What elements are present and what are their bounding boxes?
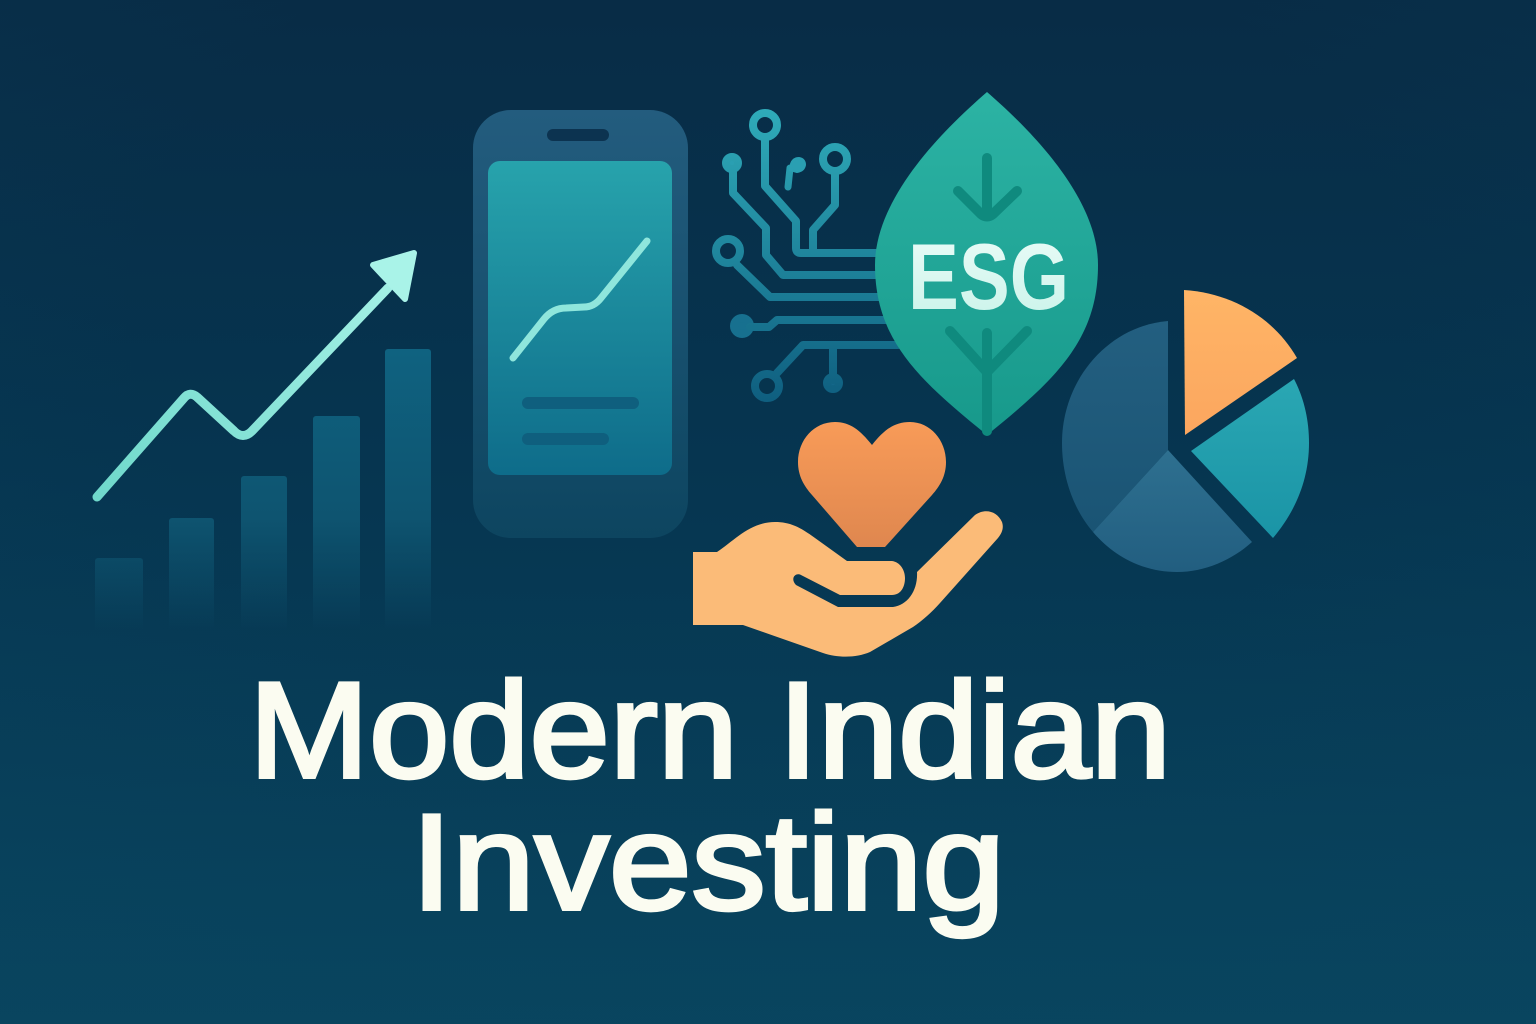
bar chart bbox=[95, 349, 431, 630]
pie slice: dark blue bbox=[1062, 321, 1168, 532]
icon: heart bbox=[798, 422, 946, 547]
title bbox=[249, 654, 1171, 938]
title: Investing bbox=[411, 786, 1005, 938]
pie slice: orange bbox=[1184, 290, 1297, 435]
icon: trend arrow bbox=[97, 253, 414, 497]
icon: ESG leaf bbox=[875, 92, 1098, 435]
chart: pie bbox=[1062, 290, 1309, 572]
icon: hand bbox=[693, 511, 1003, 657]
text: ESG: ESG bbox=[908, 224, 1069, 329]
pie slice: mid blue bbox=[1093, 450, 1252, 572]
icon: circuit lines bbox=[716, 113, 898, 398]
icon: smartphone with chart bbox=[473, 110, 688, 538]
title: Modern Indian bbox=[249, 654, 1171, 806]
icon: heart in hand bbox=[693, 422, 1003, 657]
pie slice: teal bbox=[1191, 379, 1309, 538]
chart: rising bars with trend arrow bbox=[95, 253, 431, 630]
